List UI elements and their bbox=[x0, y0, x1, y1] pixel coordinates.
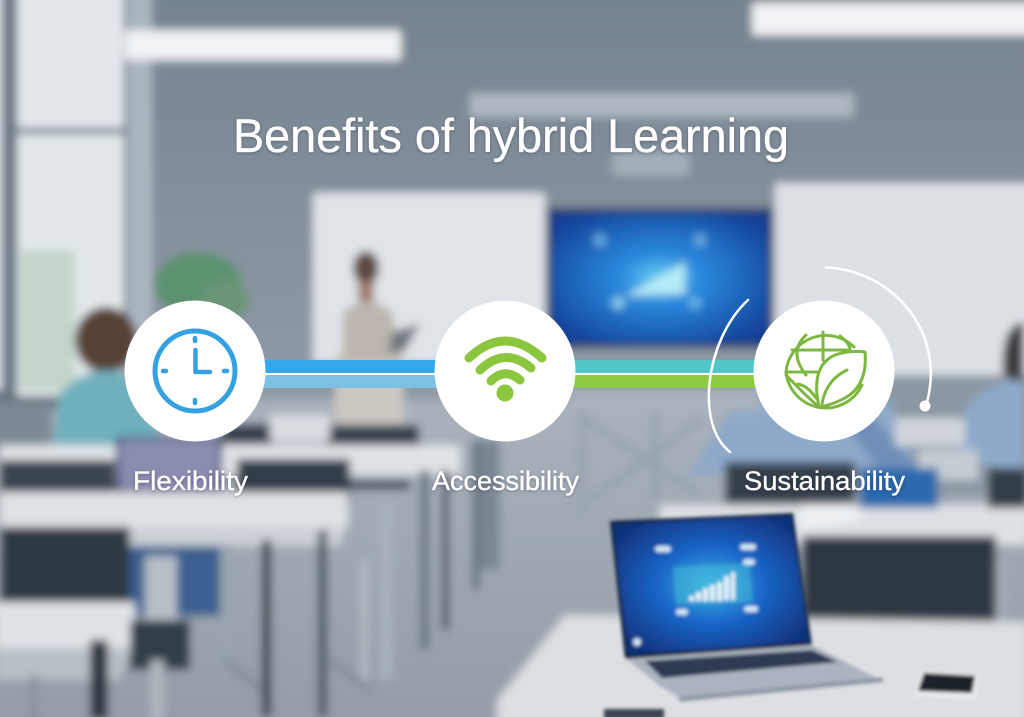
arc: upper right with dot bbox=[826, 268, 931, 412]
connector: teal and green bars bbox=[572, 360, 758, 388]
icon node: sustainability globe and leaf bbox=[754, 300, 894, 442]
connector: blue bars bbox=[262, 360, 438, 388]
label: Sustainability: Sustainability bbox=[744, 466, 905, 496]
icon node: accessibility wifi bbox=[434, 300, 576, 442]
label: Accessibility: Accessibility bbox=[432, 466, 579, 496]
title: Benefits of hybrid Learning bbox=[233, 110, 789, 163]
label: Flexibility: Flexibility bbox=[133, 466, 249, 496]
arc: left of sustainability bbox=[709, 300, 748, 452]
icon node: flexibility clock bbox=[124, 300, 266, 442]
